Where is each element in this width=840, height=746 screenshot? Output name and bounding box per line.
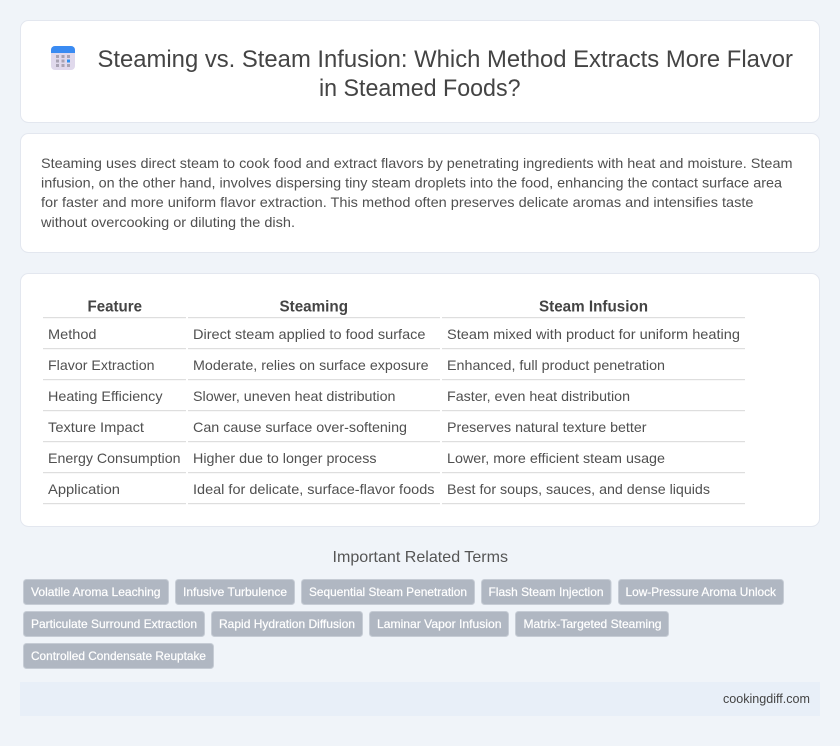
tag: Controlled Condensate Reuptake <box>31 649 206 663</box>
tag <box>24 580 168 604</box>
footer: cookingdiff.com <box>723 692 810 706</box>
tag: Volatile Aroma Leaching <box>31 585 160 599</box>
text block: description: Steaming uses direct steam to cook food and extract flavors by penetrating ingredients with heat and moisture. Steam <box>41 155 792 171</box>
tag: Infusive Turbulence <box>183 585 287 599</box>
table row: application: Best for soups, sauces, and dense liquids <box>447 481 710 497</box>
table header: Feature <box>88 298 142 316</box>
table row: texture impact <box>48 419 647 435</box>
panel: header <box>20 20 820 122</box>
tag list <box>24 580 784 668</box>
table row: application: Ideal for delicate, surface-flavor foods <box>193 481 434 497</box>
tag <box>24 612 204 636</box>
text block: description: infusion, on the other hand, involves dispersing tiny steam droplets into the food, enhancing the contact surface area <box>41 175 782 191</box>
table header <box>88 298 648 316</box>
tag: Matrix-Targeted Steaming <box>524 617 662 631</box>
table row: energy consumption: Lower, more efficient steam usage <box>447 450 665 466</box>
table row: flavor extraction <box>48 357 665 373</box>
tag <box>212 612 362 636</box>
tag: Rapid Hydration Diffusion <box>219 617 355 631</box>
footer <box>20 682 820 716</box>
table row: texture impact: Texture Impact <box>48 419 144 435</box>
table header: Steaming <box>280 298 348 316</box>
table row: energy consumption: Energy Consumption <box>48 450 180 466</box>
tag <box>176 580 294 604</box>
table row: texture impact: Preserves natural texture better <box>447 419 647 435</box>
table header: Steam Infusion <box>539 298 648 316</box>
tag <box>516 612 668 636</box>
table row: method: Method <box>48 326 96 342</box>
table row: heating efficiency: Faster, even heat distribution <box>447 388 630 404</box>
tag <box>24 644 214 668</box>
text block: description: for faster and more uniform flavor extraction. This method often preserves delicate aromas and intensifies taste <box>41 194 754 210</box>
table row: flavor extraction: Moderate, relies on surface exposure <box>193 357 429 373</box>
table row: method <box>48 326 740 342</box>
tag <box>302 580 474 604</box>
text block: description <box>40 155 792 230</box>
table row: application <box>48 481 710 497</box>
table row: texture impact: Can cause surface over-softening <box>193 419 407 435</box>
table row: method: Steam mixed with product for uniform heating <box>447 326 740 342</box>
tag <box>370 612 508 636</box>
panel: intro paragraph <box>20 134 820 252</box>
tag: Laminar Vapor Infusion <box>377 617 502 631</box>
table row: method: Direct steam applied to food surface <box>193 326 426 342</box>
table row: energy consumption <box>48 450 665 466</box>
tag: Sequential Steam Penetration <box>309 585 467 599</box>
title <box>98 46 793 102</box>
table row: flavor extraction: Enhanced, full product penetration <box>447 357 665 373</box>
panel: comparison table <box>20 274 820 526</box>
icon: calendar <box>51 46 75 70</box>
table row: heating efficiency: Heating Efficiency <box>48 388 162 404</box>
table row: heating efficiency <box>48 388 630 404</box>
tag: Low-Pressure Aroma Unlock <box>626 585 777 599</box>
title: in Steamed Foods? <box>319 75 520 102</box>
title: Steaming vs. Steam Infusion: Which Method Extracts More Flavor <box>98 46 793 73</box>
table row: application: Application <box>48 481 120 497</box>
tag: Flash Steam Injection <box>488 585 604 599</box>
heading: related terms: Important Related Terms <box>332 549 508 566</box>
table row: heating efficiency: Slower, uneven heat distribution <box>193 388 396 404</box>
tag <box>618 580 784 604</box>
table row: flavor extraction: Flavor Extraction <box>48 357 154 373</box>
text block: description: without overcooking or diluting the dish. <box>40 214 295 230</box>
tag: Particulate Surround Extraction <box>31 617 197 631</box>
tag <box>482 580 611 604</box>
table row: energy consumption: Higher due to longer process <box>193 450 376 466</box>
